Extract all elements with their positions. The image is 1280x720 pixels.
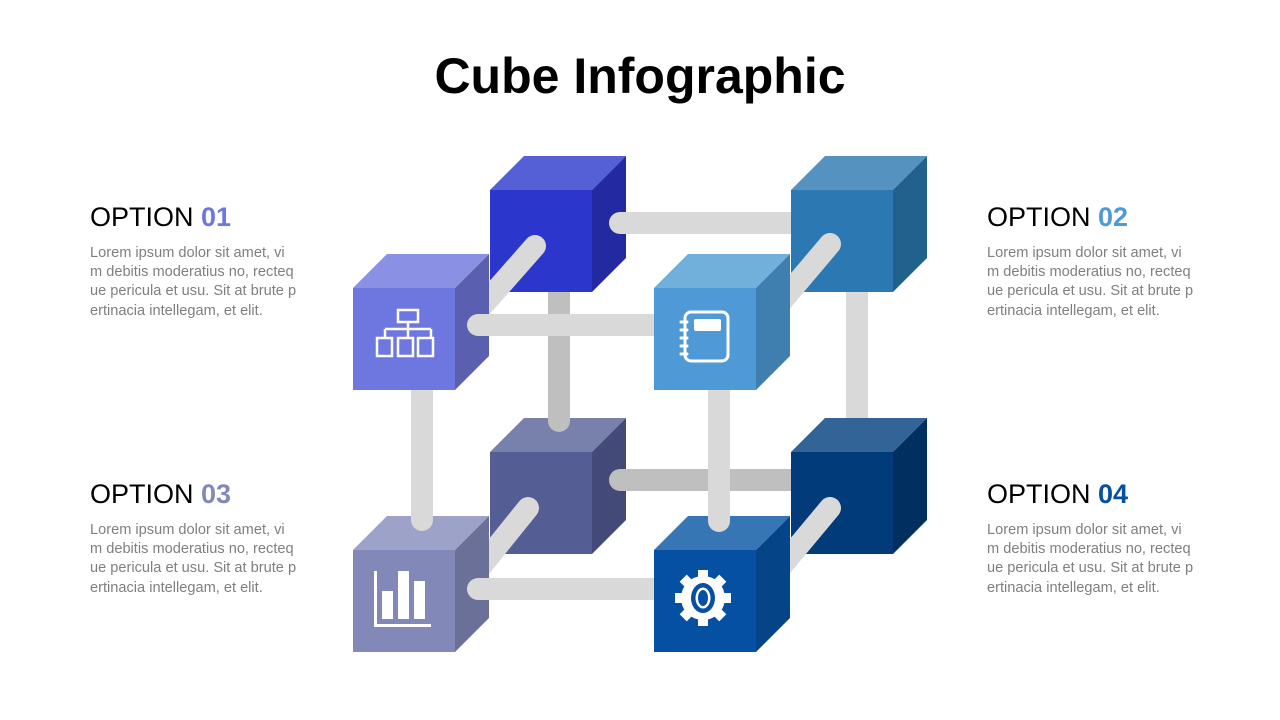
option 04 text: Lorem ipsum dolor sit amet, vi bbox=[987, 522, 1182, 538]
option 01 text: m debitis moderatius no, recteq bbox=[90, 264, 294, 280]
option 01 text: OPTION 01 bbox=[90, 202, 231, 232]
cube: front bottom-left with chart icon bbox=[353, 516, 489, 652]
option 02 text: Lorem ipsum dolor sit amet, vi bbox=[987, 245, 1182, 261]
option 03 text bbox=[90, 479, 296, 596]
option 03 text: ertinacia intellegam, et elit. bbox=[90, 580, 263, 596]
option 01 text: Lorem ipsum dolor sit amet, vi bbox=[90, 245, 285, 261]
cube: back bottom-left bbox=[490, 418, 626, 554]
option 03 text: ue pericula et usu. Sit at brute p bbox=[90, 560, 296, 576]
icon: notebook bbox=[681, 312, 728, 361]
option 04 text: ue pericula et usu. Sit at brute p bbox=[987, 560, 1193, 576]
icon: bar chart bbox=[374, 571, 431, 627]
option 02 text: m debitis moderatius no, recteq bbox=[987, 264, 1191, 280]
cube: back top-left bbox=[490, 156, 626, 292]
option 04 text bbox=[987, 479, 1193, 596]
option 02 text bbox=[987, 202, 1193, 319]
option 03 text: Lorem ipsum dolor sit amet, vi bbox=[90, 522, 285, 538]
front connector rods bbox=[411, 314, 730, 600]
cube: back top-right bbox=[791, 156, 927, 292]
icon: gear bbox=[675, 570, 731, 626]
option 02 text: ertinacia intellegam, et elit. bbox=[987, 303, 1160, 319]
option 01 text bbox=[90, 202, 296, 319]
option 03 text: OPTION 03 bbox=[90, 479, 231, 509]
option 01 text: ertinacia intellegam, et elit. bbox=[90, 303, 263, 319]
title: Cube Infographic bbox=[434, 48, 846, 104]
option 01 text: ue pericula et usu. Sit at brute p bbox=[90, 283, 296, 299]
cube: back bottom-right bbox=[791, 418, 927, 554]
option 02 text: ue pericula et usu. Sit at brute p bbox=[987, 283, 1193, 299]
option 04 text: ertinacia intellegam, et elit. bbox=[987, 580, 1160, 596]
icon: hierarchy bbox=[377, 310, 433, 356]
cube: front bottom-right with gear icon bbox=[654, 516, 790, 652]
back connector rods bbox=[470, 212, 857, 580]
option 04 text: OPTION 04 bbox=[987, 479, 1128, 509]
cube: front top-right with notebook icon bbox=[654, 254, 790, 390]
cube: front top-left with hierarchy icon bbox=[353, 254, 489, 390]
option 03 text: m debitis moderatius no, recteq bbox=[90, 541, 294, 557]
option 04 text: m debitis moderatius no, recteq bbox=[987, 541, 1191, 557]
option 02 text: OPTION 02 bbox=[987, 202, 1128, 232]
